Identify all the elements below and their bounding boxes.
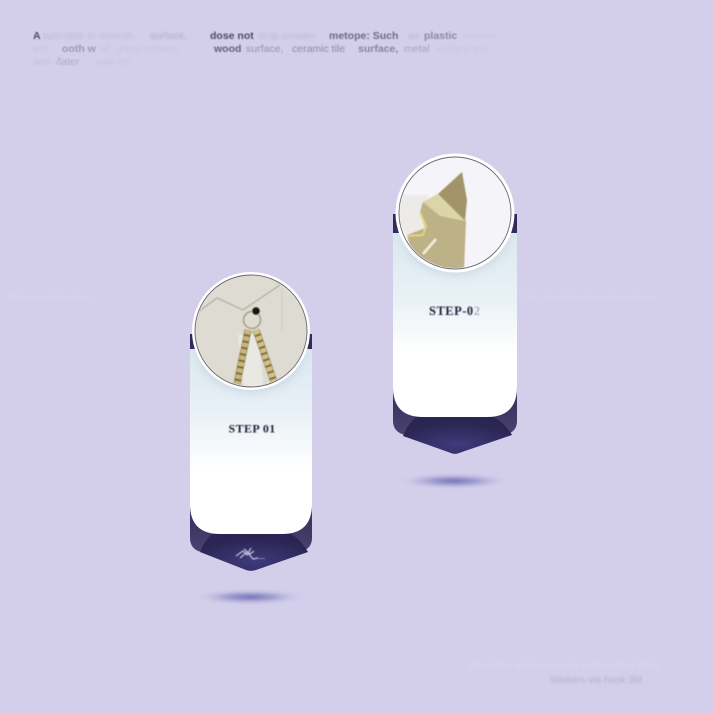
top description text: wall etc.: [95, 56, 134, 68]
top description text: ceramic tile: [292, 43, 345, 55]
card base: [393, 214, 517, 454]
top description text: [33, 30, 497, 68]
card body: [393, 233, 517, 417]
faint side captions: Step one instructions: [8, 292, 93, 302]
top description text: metope: Such: [329, 30, 398, 42]
top description text: A: [33, 30, 41, 42]
faint side captions: Step two instructions for wall use: [522, 292, 653, 302]
top description text: wood: [213, 43, 241, 55]
label: step 02: STEP-02: [429, 304, 480, 318]
top description text: metal: [404, 43, 430, 55]
photo shadow: [199, 308, 303, 392]
label: step 01: STEP 01: [228, 422, 276, 436]
top description text: and: [33, 56, 51, 68]
card lower panel: [200, 533, 308, 571]
top description text: pplicable to smooth: [43, 30, 134, 42]
bottom right note: Paste the stickers on the wall surface firmly: [470, 661, 662, 672]
photo: ring and chain on wall: [192, 272, 310, 390]
shadow: step 02: [394, 473, 514, 489]
top description text: plastic: [424, 30, 457, 42]
top description text: dose not: [210, 30, 254, 42]
top description text: drop powder: [258, 30, 317, 42]
top description text: all, glass surface,: [100, 43, 181, 55]
top description text: as: [408, 30, 419, 42]
top description text: surface,: [246, 43, 283, 55]
card base: [190, 334, 312, 571]
shadow: step 01: [190, 589, 310, 605]
card: step 01: [190, 272, 312, 571]
photo: peeling gold film: [396, 154, 514, 272]
top description text: surface,: [150, 30, 187, 42]
top description text: surface etc: [436, 43, 487, 55]
bottom right note: Stickers via hook 3M: [550, 675, 642, 686]
faint side captions: [8, 292, 653, 302]
card: step 02: [393, 154, 517, 454]
top description text: sm: [33, 43, 47, 55]
top description text: ooth w: [62, 43, 97, 55]
card lower panel: [403, 417, 512, 454]
photo shadow: [403, 190, 507, 274]
card body: [190, 349, 312, 534]
top description text: surface,: [358, 43, 398, 55]
top description text: /later: [56, 56, 80, 68]
logo mark: [236, 548, 265, 559]
bottom right note: [470, 661, 662, 686]
top description text: surface: [462, 30, 497, 42]
